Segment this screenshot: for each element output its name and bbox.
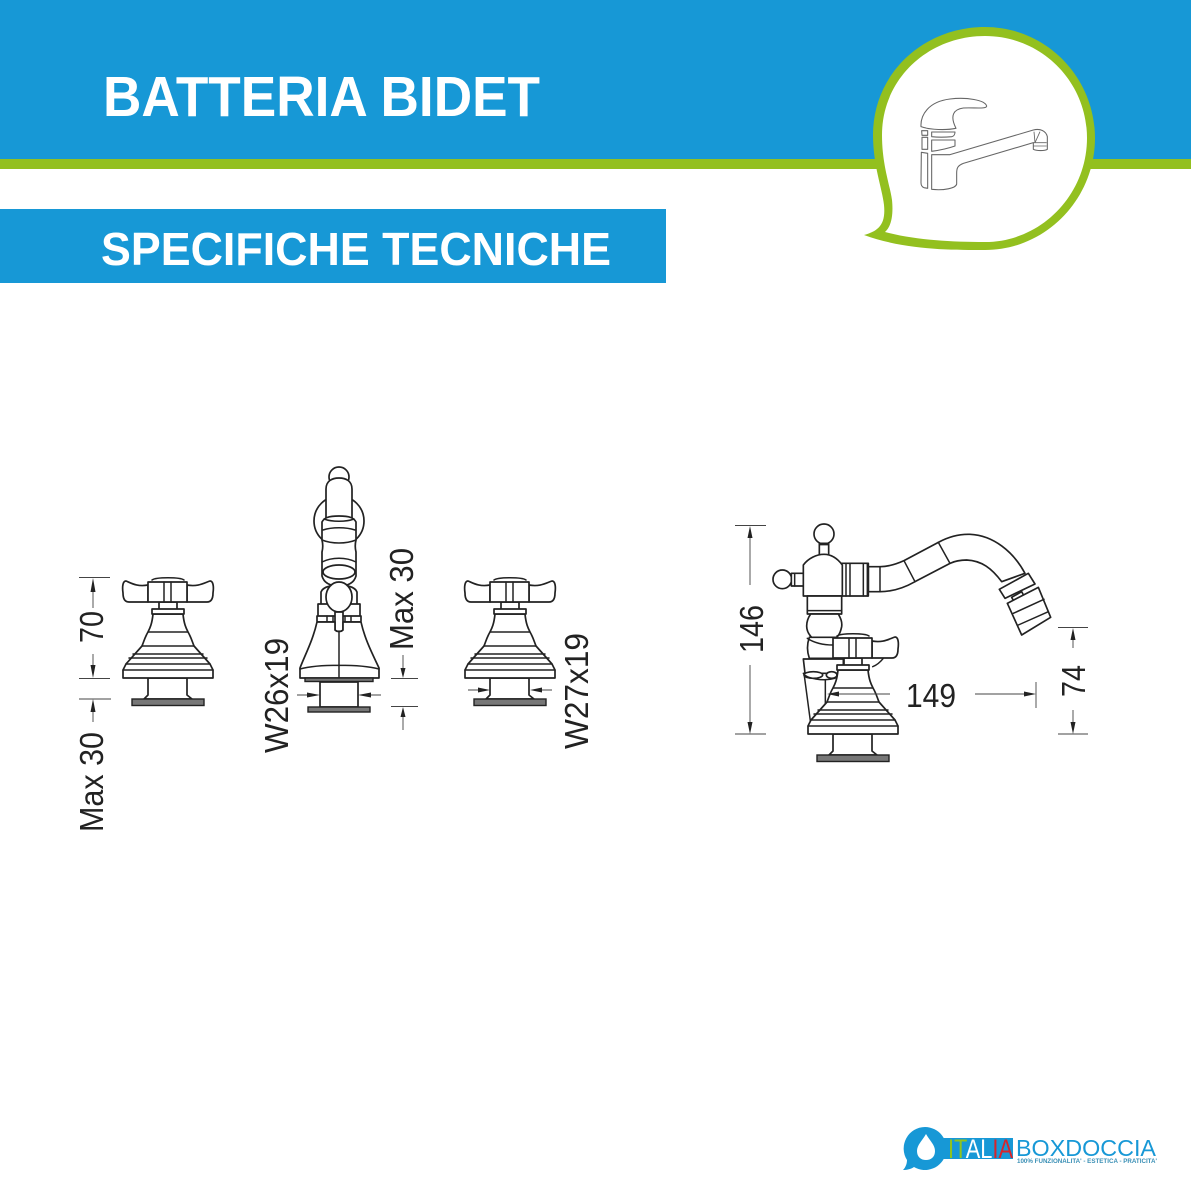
tap in front — [808, 634, 898, 762]
drawing: right cross handle tap — [465, 578, 555, 706]
header band — [0, 0, 1191, 159]
dimension: W27x19: W27x19 — [558, 633, 595, 749]
dimension: 74: 74 — [1055, 665, 1092, 697]
dimension: Max 30 centre: Max 30 — [383, 548, 420, 650]
logo tagline: 100% FUNZIONALITA' - ESTETICA - PRATICITA' — [1017, 1158, 1157, 1165]
logo band — [942, 1138, 1013, 1159]
dimension: 149 — [827, 677, 1036, 714]
dimension: 146 — [733, 526, 770, 734]
dimension: W27x19 — [468, 633, 595, 749]
dimension: W26x19: W26x19 — [258, 638, 295, 753]
header green stripe — [0, 159, 1191, 169]
spout — [773, 524, 1051, 723]
logo: Italia Boxdoccia — [903, 1127, 1157, 1170]
drawing: left cross handle tap — [123, 578, 213, 706]
dimension: 70 — [73, 578, 110, 678]
dimension: Max 30 left: Max 30 — [73, 732, 110, 832]
subtitle band — [0, 209, 666, 283]
drawing: centre spout front view — [300, 467, 379, 712]
icon: speech bubble with water drop — [903, 1127, 946, 1170]
dimension: 70: 70 — [73, 611, 110, 643]
title: BATTERIA BIDET — [103, 65, 540, 129]
dimension: 146: 146 — [733, 605, 770, 653]
speech bubble with faucet icon — [864, 27, 1095, 250]
dimension: W26x19 — [258, 638, 381, 753]
logo wordmark ITALIA: ITALIA — [948, 1134, 1013, 1164]
drawing: bidet mixer side view — [773, 524, 1051, 762]
dimension: 149: 149 — [906, 677, 956, 714]
subtitle: SPECIFICHE TECNICHE — [101, 223, 611, 275]
dimension: 74 — [1055, 628, 1092, 734]
icon: mixer faucet — [921, 98, 1047, 190]
dimension: Max 30 centre — [383, 548, 420, 730]
logo wordmark BOXDOCCIA: BOXDOCCIA — [1016, 1135, 1156, 1161]
